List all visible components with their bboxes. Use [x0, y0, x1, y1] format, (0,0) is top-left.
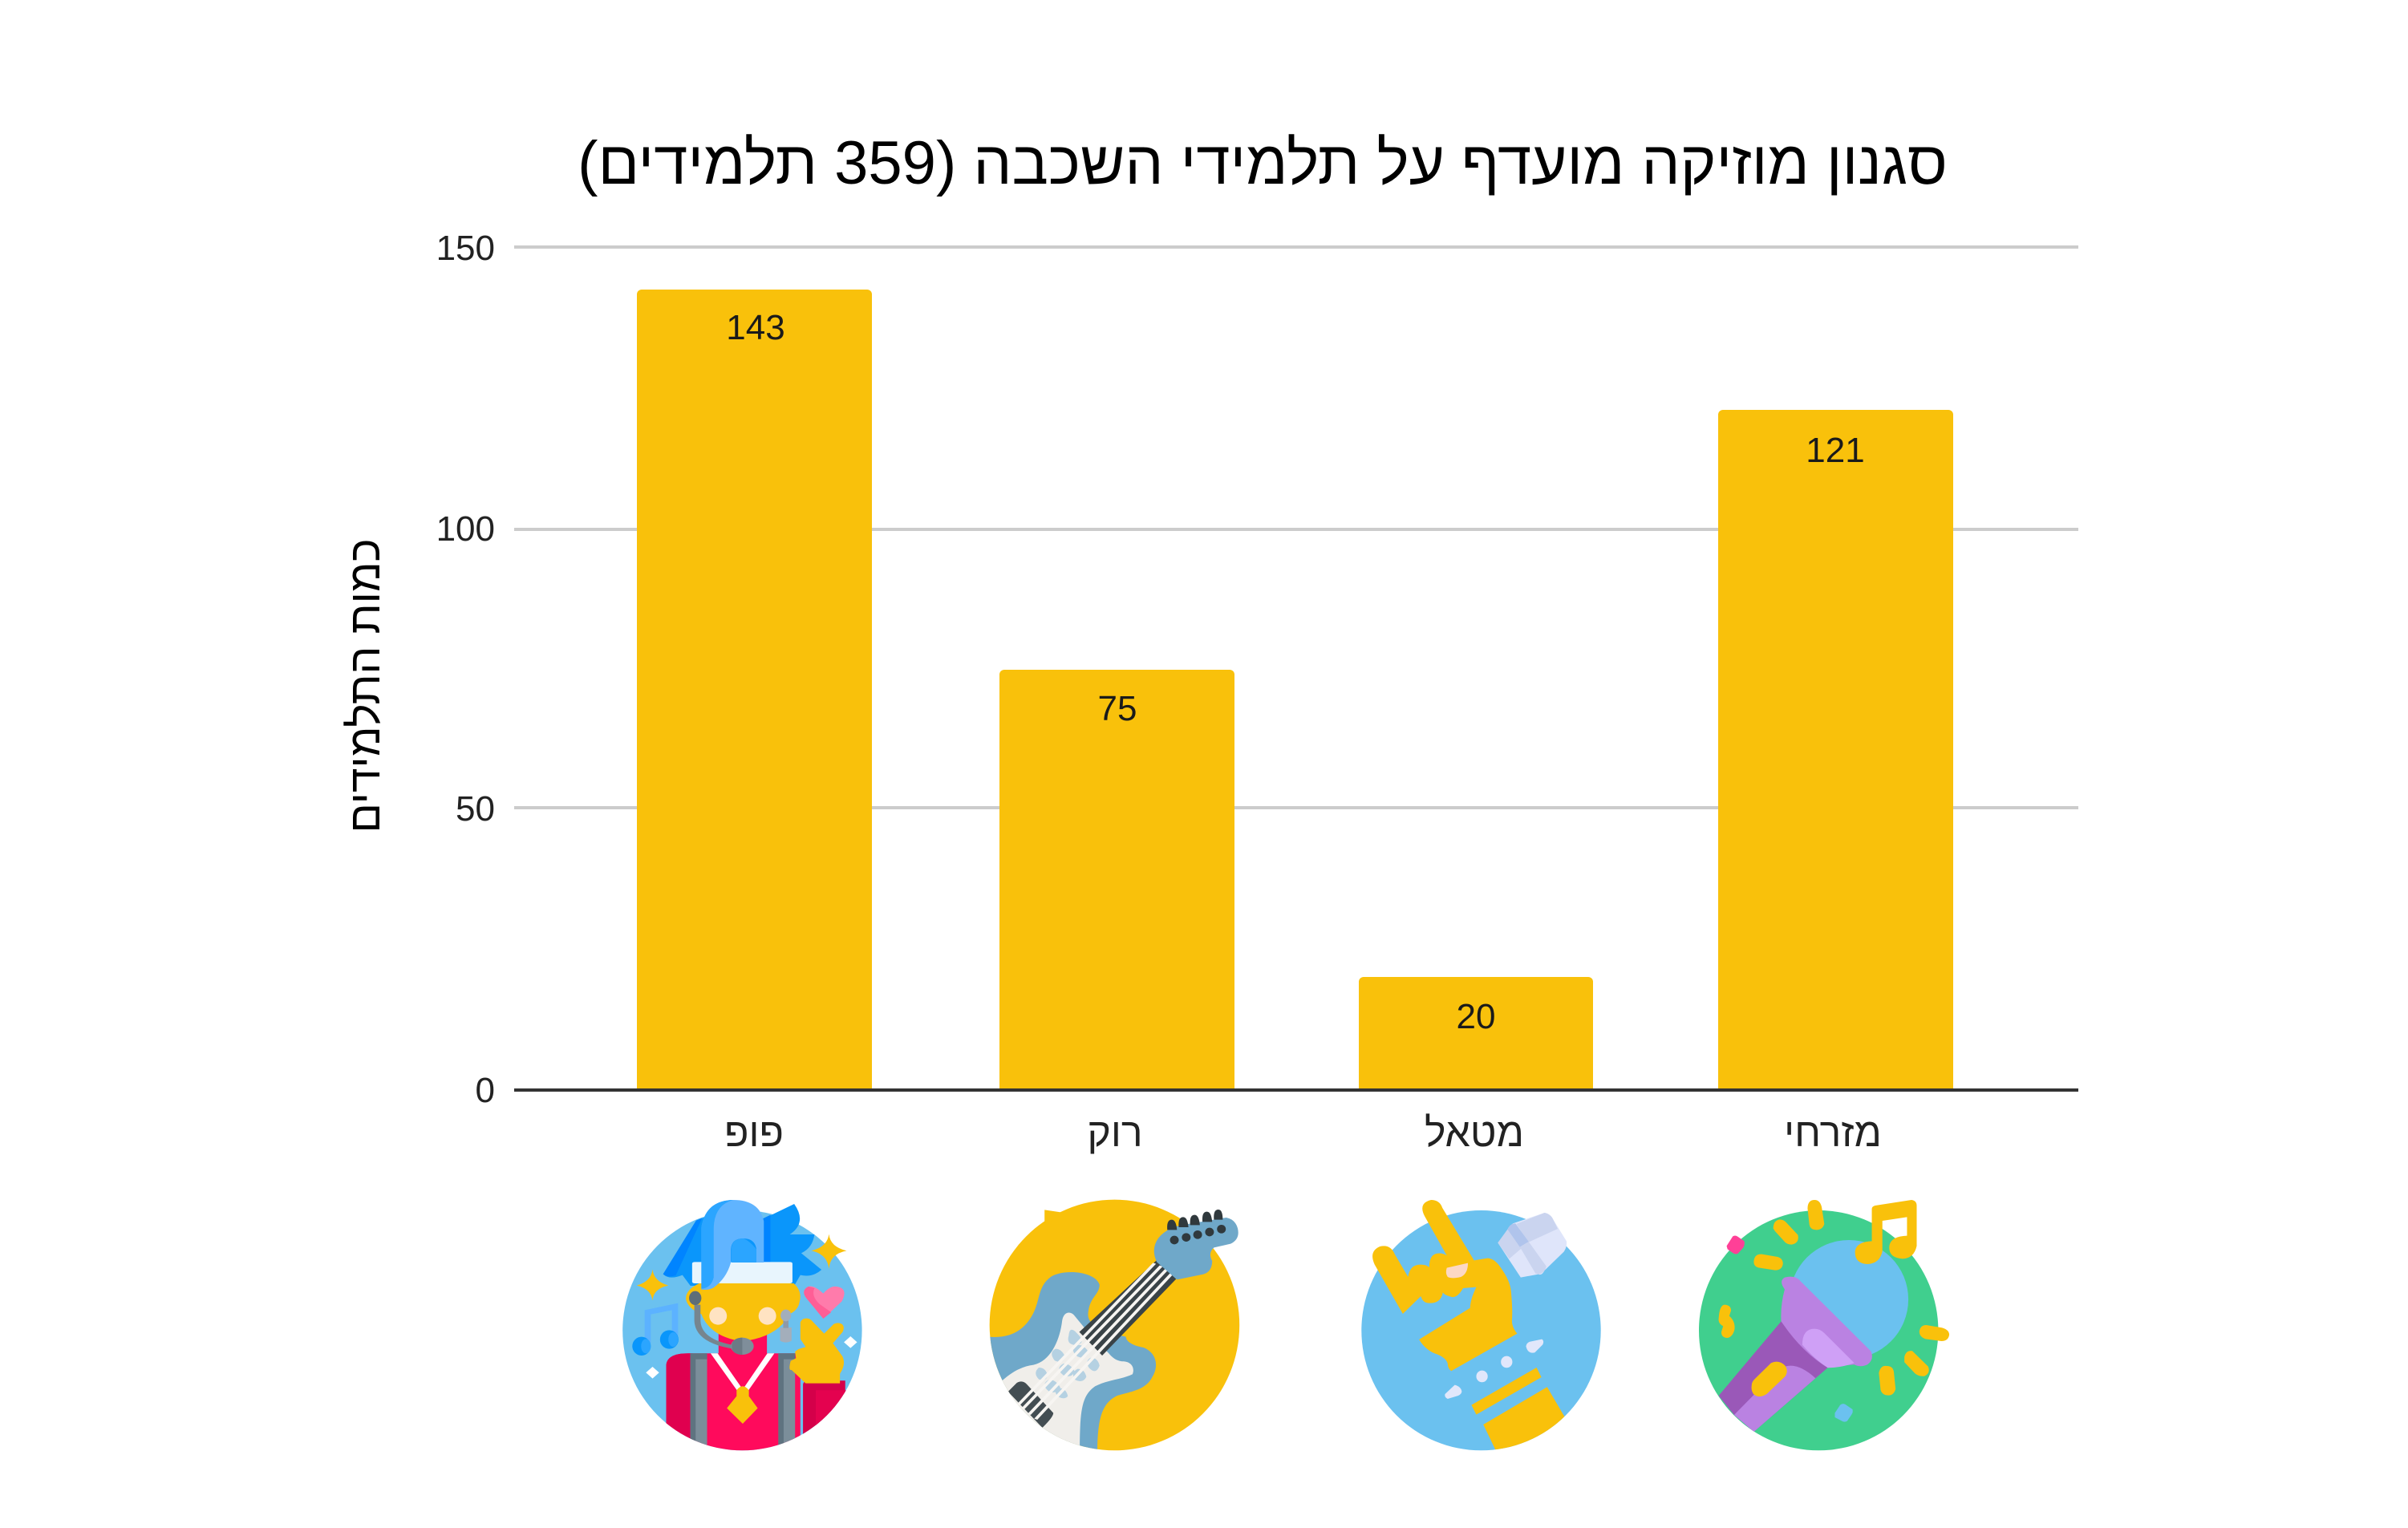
- gridlines and y axis ticks: 100: [436, 509, 495, 549]
- crystal: [1498, 1213, 1567, 1278]
- heart: [804, 1287, 845, 1319]
- sparkles: [812, 1234, 846, 1269]
- hair: [663, 1204, 821, 1286]
- music note: [645, 1303, 678, 1344]
- icon: electric guitar: [990, 1200, 1239, 1452]
- x axis line: [514, 1088, 2078, 1092]
- bar: metal 20: 20: [1457, 997, 1495, 1036]
- category labels: [724, 1110, 1882, 1155]
- finger heart hand: [789, 1319, 844, 1384]
- category labels: רוק: [1087, 1110, 1143, 1155]
- gridlines and y axis ticks: 0: [476, 1071, 495, 1110]
- bracelet dots: [1445, 1340, 1543, 1399]
- y axis title: כמות התלמידים: [339, 538, 389, 833]
- guitar neck: [1080, 1259, 1176, 1356]
- diamonds: [646, 1336, 857, 1379]
- headset: [697, 1305, 737, 1348]
- bar: rock 75: [999, 670, 1234, 1089]
- title: סגנון מוזיקה מועדף על תלמידי השכבה (359 תלמידים): [578, 129, 1948, 197]
- bar: mizrahi 121: 121: [1806, 431, 1865, 470]
- icon: microphone: [1699, 1200, 1949, 1450]
- music notes: [1855, 1200, 1917, 1264]
- bar: mizrahi 121: [1718, 410, 1953, 1089]
- bar: rock 75: 75: [1098, 689, 1137, 728]
- wristband: [1471, 1368, 1542, 1415]
- gridlines and y axis ticks: [436, 229, 2078, 1110]
- category labels: פופ: [724, 1110, 784, 1155]
- gridlines and y axis ticks: 50: [456, 789, 495, 829]
- confetti: [1752, 1362, 1787, 1396]
- face: [686, 1283, 801, 1341]
- guitar bridge: [1008, 1381, 1053, 1428]
- bar: pop 143: [637, 290, 872, 1089]
- bar: pop 143: 143: [726, 308, 785, 347]
- guitar strings: [1018, 1263, 1173, 1419]
- hand: [1372, 1200, 1517, 1371]
- infographic canvas: [343, 134, 2078, 1450]
- category labels: מזרחי: [1784, 1110, 1882, 1155]
- bar: metal 20: [1359, 977, 1593, 1089]
- gridlines and y axis ticks: 150: [436, 229, 495, 268]
- icon: rock hand: [1361, 1200, 1601, 1457]
- icon: pop singer: [622, 1200, 862, 1456]
- bar chart: [436, 229, 2078, 1155]
- microphone stand: [780, 1327, 792, 1343]
- guitar headstock: [1154, 1218, 1238, 1279]
- category labels: מטאל: [1425, 1110, 1524, 1155]
